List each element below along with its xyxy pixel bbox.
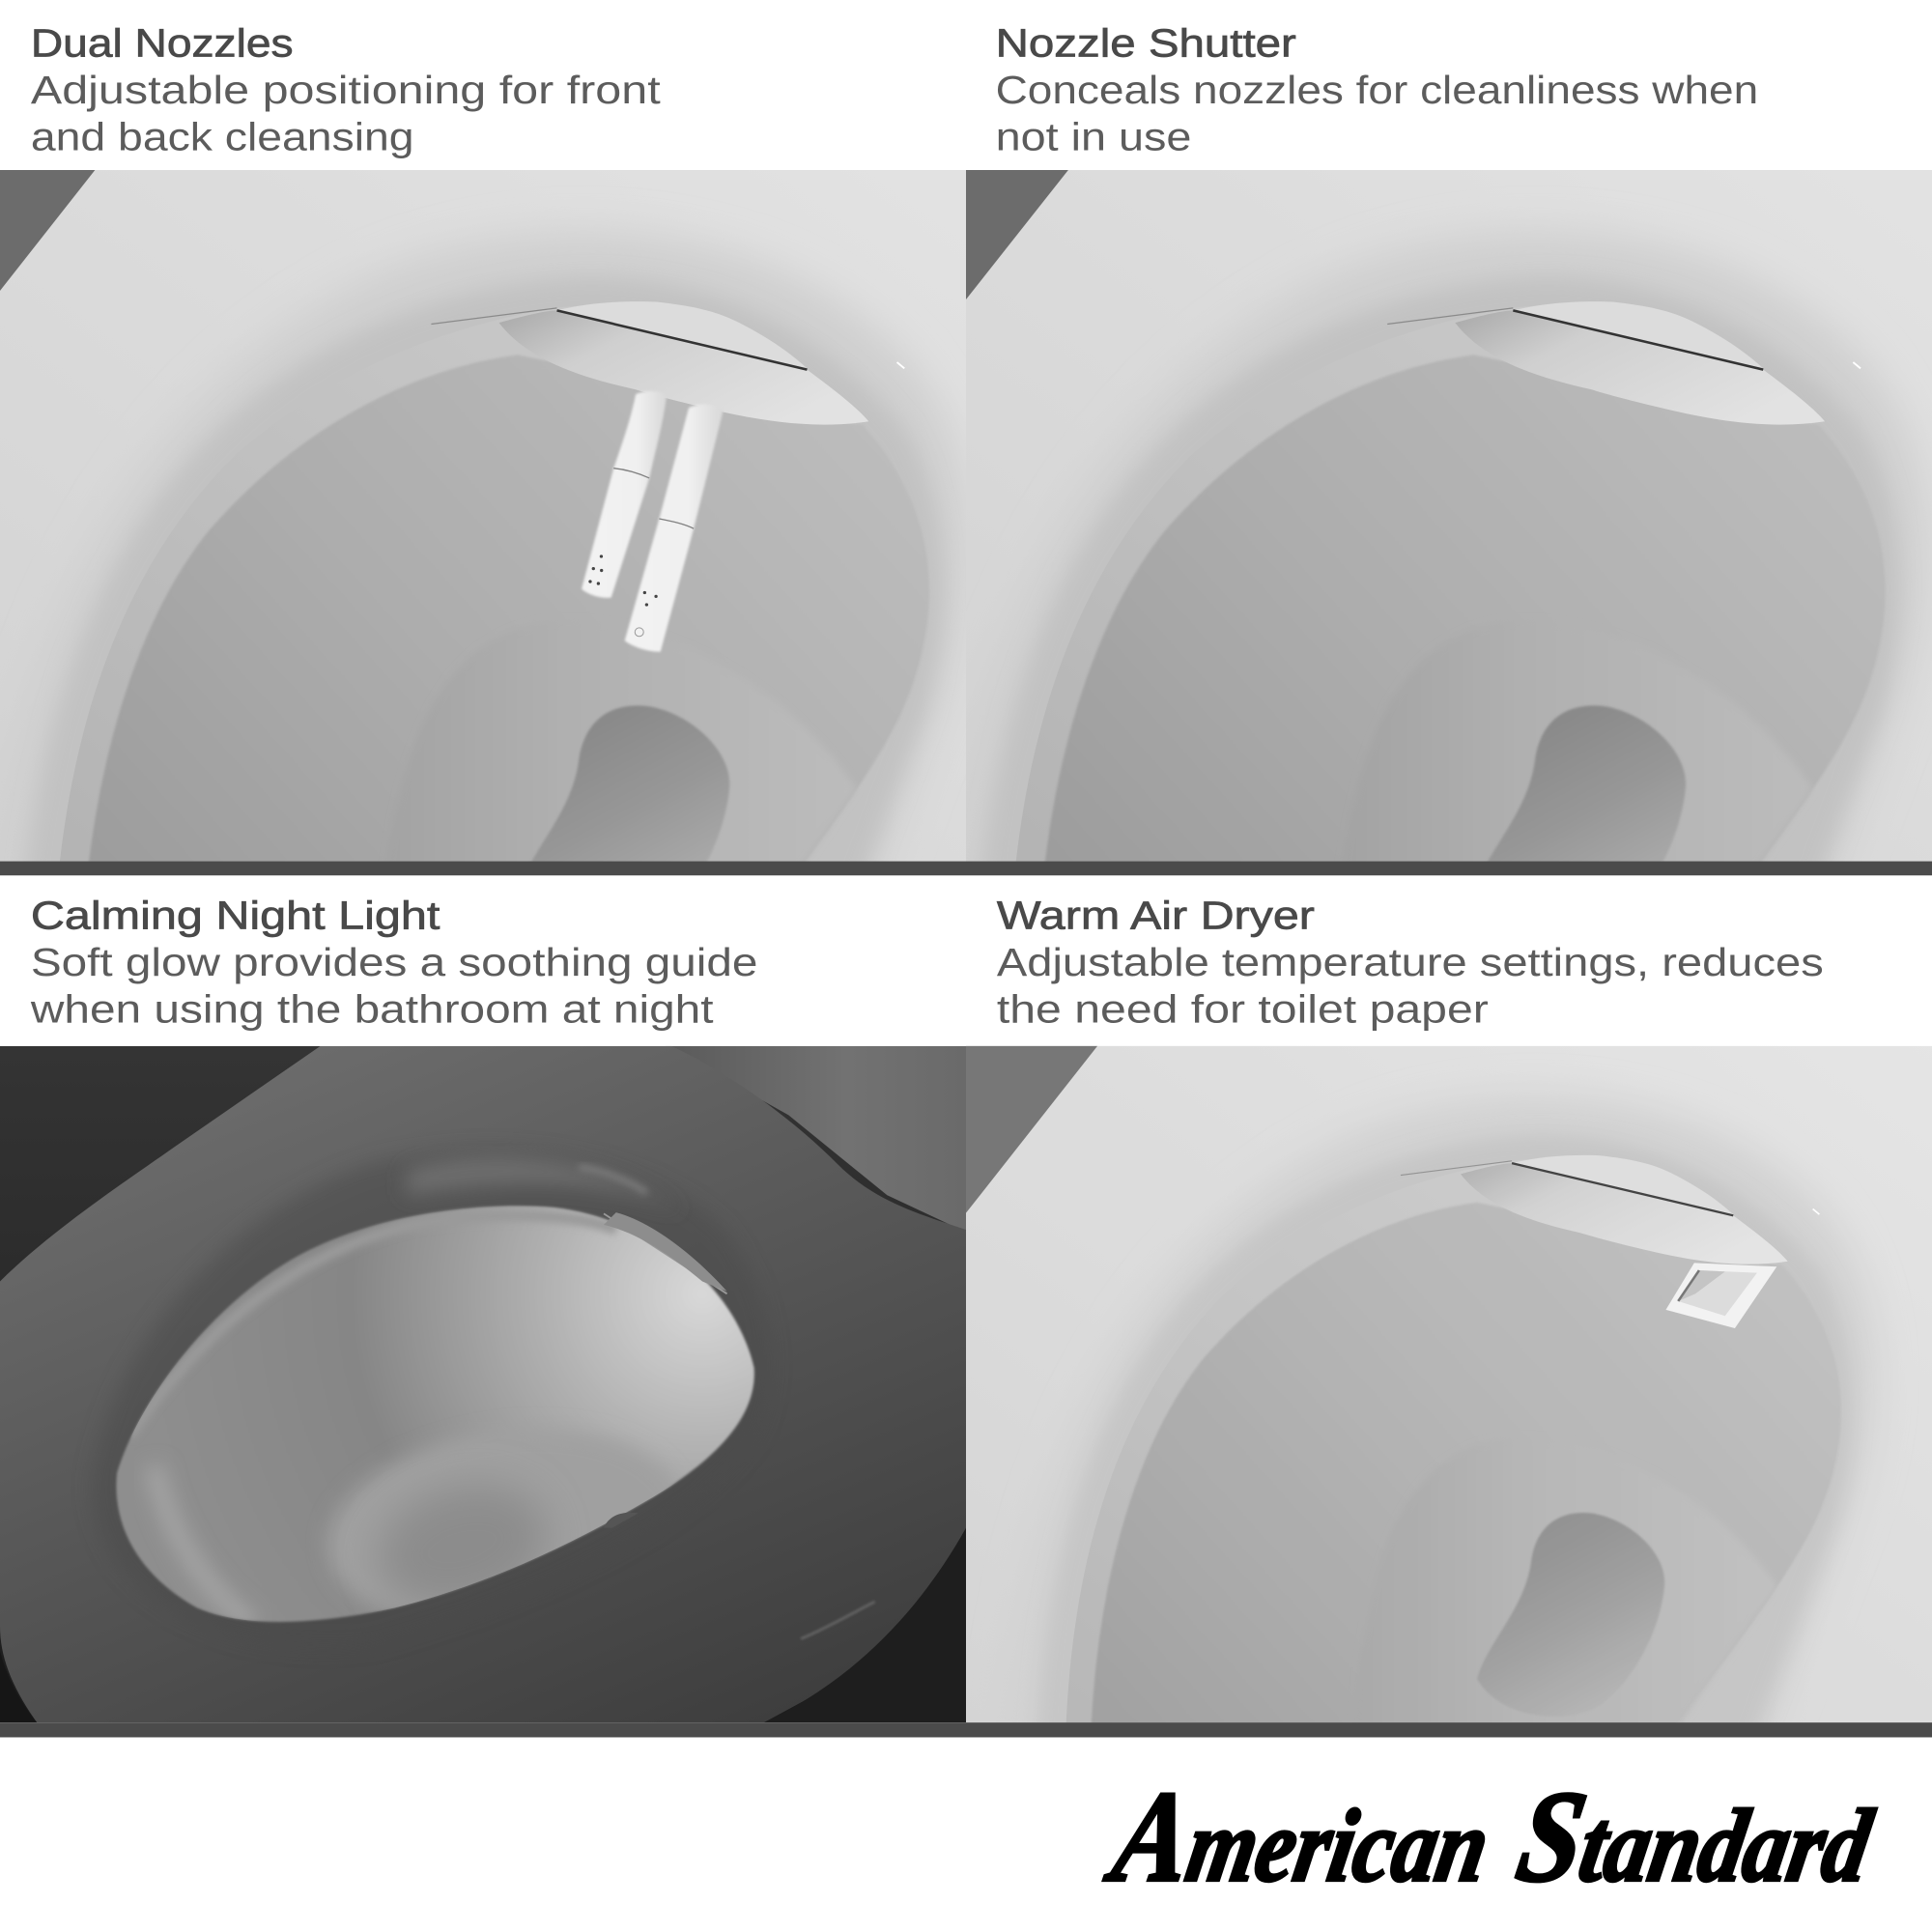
divider bar upper — [0, 862, 1932, 875]
panel: nozzle shutter — [966, 27, 1932, 862]
logo: American Standard: American — [1097, 1765, 1501, 1909]
caption: nozzle shutter: Nozzle Shutter — [996, 21, 1296, 66]
icon: front nozzle — [625, 405, 724, 652]
photo: toilet bowl with nozzles — [0, 170, 966, 862]
caption: dual nozzles: Dual Nozzles — [31, 21, 294, 66]
caption: dual nozzles: Adjustable positioning for front — [31, 68, 661, 112]
caption: warm air dryer: Adjustable temperature settings, reduces — [997, 940, 1824, 984]
caption: warm air dryer: Warm Air Dryer — [997, 894, 1315, 938]
caption: nozzle shutter: Conceals nozzles for cleanliness when — [996, 68, 1758, 112]
caption: dual nozzles — [31, 21, 661, 159]
caption: calming night light: when using the bathroom at night — [30, 987, 714, 1032]
logo: American Standard — [1097, 1765, 1885, 1909]
caption: nozzle shutter: not in use — [996, 115, 1191, 159]
photo: toilet with night light glow — [0, 1046, 966, 1722]
caption: calming night light — [30, 894, 757, 1032]
panel: calming night light — [0, 894, 966, 1722]
divider bar lower — [0, 1722, 1932, 1737]
panel: dual nozzles — [0, 27, 966, 862]
logo: American Standard: Standard — [1508, 1765, 1885, 1909]
photo: toilet bowl with closed shutter — [966, 170, 1932, 862]
caption: calming night light: Soft glow provides a soothing guide — [31, 940, 757, 984]
caption: warm air dryer — [997, 894, 1824, 1032]
glow interior — [129, 1215, 696, 1648]
caption: nozzle shutter — [996, 21, 1758, 159]
panel: warm air dryer — [966, 900, 1932, 1723]
caption: dual nozzles: and back cleansing — [31, 115, 414, 159]
caption: calming night light: Calming Night Light — [31, 894, 440, 938]
caption: warm air dryer: the need for toilet paper — [997, 987, 1489, 1032]
photo: toilet bowl with dryer vent — [966, 1045, 1932, 1723]
icon: rear nozzle — [582, 391, 667, 598]
icon: dryer vent — [1665, 1263, 1776, 1328]
